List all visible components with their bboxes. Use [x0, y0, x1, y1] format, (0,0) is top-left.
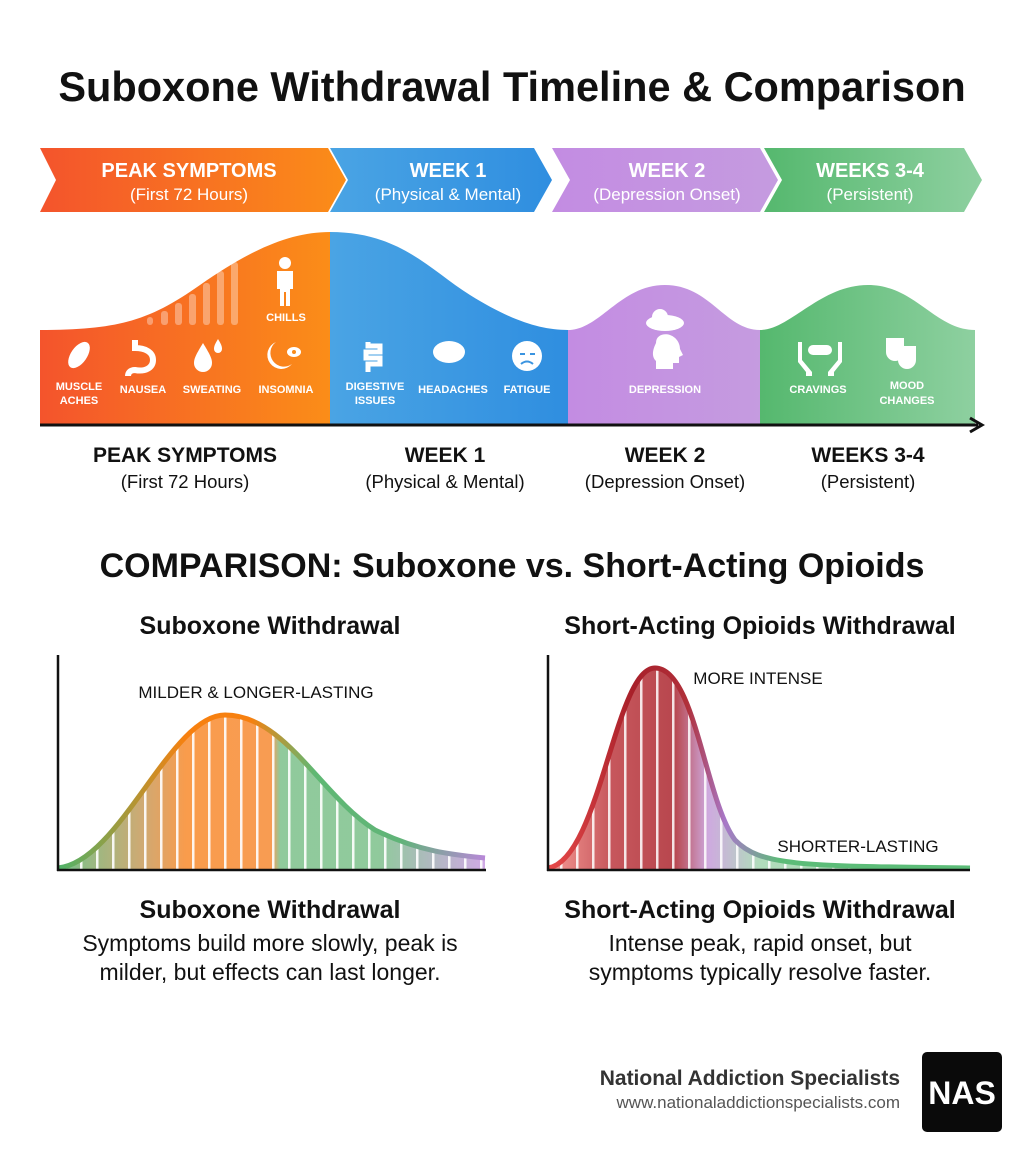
icon: depression: DEPRESSION — [629, 384, 701, 396]
phase labels: (Depression Onset) — [585, 471, 745, 492]
panel: suboxone: Symptoms build more slowly, peak is — [82, 930, 458, 956]
chevron: peak symptoms — [40, 148, 346, 212]
phase labels: (Persistent) — [821, 471, 915, 492]
icon: sweating: SWEATING — [183, 384, 241, 396]
chevron: weeks 3-4: WEEKS 3-4 — [816, 160, 925, 182]
icon: insomnia — [258, 342, 314, 396]
phase labels: (Physical & Mental) — [365, 471, 525, 492]
chart: short-acting curve — [547, 655, 970, 871]
footer brand: www.nationaladdictionspecialists.com — [616, 1093, 900, 1112]
panel: short-acting opioids: symptoms typically resolve faster. — [589, 959, 931, 985]
chart: short-acting curve: MORE INTENSE — [693, 669, 823, 688]
icon: headaches — [418, 341, 488, 396]
icon: mood changes — [879, 338, 935, 407]
phase labels: WEEKS 3-4 — [811, 444, 925, 467]
phase labels: WEEK 1 — [405, 444, 486, 467]
chevron: week 1 — [330, 148, 552, 212]
chevron: weeks 3-4 — [764, 148, 982, 212]
footer brand: National Addiction Specialists — [600, 1067, 900, 1090]
footer brand — [600, 1052, 1002, 1132]
icon: muscle aches — [56, 338, 102, 407]
chart: suboxone curve: MILDER & LONGER-LASTING — [138, 683, 374, 702]
phase banner — [40, 148, 982, 212]
chevron: peak symptoms: PEAK SYMPTOMS — [101, 160, 277, 182]
panel: short-acting opioids: Intense peak, rapid onset, but — [608, 930, 912, 956]
chevron: week 2: (Depression Onset) — [593, 185, 741, 204]
wave: week 1 — [330, 232, 568, 425]
chart: suboxone curve — [57, 655, 486, 871]
chevron: week 1: (Physical & Mental) — [375, 185, 521, 204]
wave: week 2 — [568, 285, 760, 425]
chevron: peak symptoms: (First 72 Hours) — [130, 185, 248, 204]
icon: nausea: NAUSEA — [120, 384, 166, 396]
icon: digestive: DIGESTIVE — [346, 381, 404, 393]
chevron: weeks 3-4: (Persistent) — [827, 185, 913, 204]
icon: digestive — [346, 342, 404, 407]
icon: mood changes: CHANGES — [879, 395, 935, 407]
panel: suboxone: Suboxone Withdrawal — [140, 896, 400, 924]
icon: cravings — [789, 342, 847, 396]
arrow: timeline axis — [40, 418, 982, 432]
wave: peak symptoms — [40, 232, 330, 425]
comparison heading: COMPARISON: Suboxone vs. Short-Acting Opioids — [100, 547, 924, 585]
panel: short-acting opioids: Short-Acting Opioids Withdrawal — [564, 612, 956, 640]
panel: suboxone: milder, but effects can last longer. — [100, 959, 440, 985]
timeline wave — [40, 232, 982, 432]
icon: cravings: CRAVINGS — [789, 384, 847, 396]
panel: suboxone — [57, 612, 486, 985]
phase labels — [93, 444, 925, 492]
phase labels: WEEK 2 — [625, 444, 705, 467]
icon: nausea — [120, 340, 166, 396]
chart: short-acting curve: SHORTER-LASTING — [777, 837, 939, 856]
phase labels: (First 72 Hours) — [121, 471, 249, 492]
icon: muscle aches: MUSCLE — [56, 381, 102, 393]
icon: sweating — [183, 339, 241, 396]
icon: intensity bars — [147, 262, 238, 325]
chevron: week 2 — [552, 148, 778, 212]
title: Suboxone Withdrawal Timeline & Comparison — [58, 63, 966, 110]
icon: digestive: ISSUES — [355, 395, 395, 407]
icon: fatigue — [504, 341, 550, 396]
icon: mood changes: MOOD — [890, 380, 924, 392]
icon: muscle aches: ACHES — [60, 395, 98, 407]
icon: chills — [266, 257, 306, 324]
chevron: week 1: WEEK 1 — [410, 160, 486, 182]
icon: insomnia: INSOMNIA — [258, 384, 314, 396]
logo: NAS — [922, 1052, 1002, 1132]
panel: suboxone: Suboxone Withdrawal — [140, 612, 400, 640]
icon: fatigue: FATIGUE — [504, 384, 550, 396]
icon: headaches: HEADACHES — [418, 384, 488, 396]
wave: weeks 3-4 — [760, 285, 975, 425]
panel: short-acting opioids: Short-Acting Opioids Withdrawal — [564, 896, 956, 924]
logo: NAS: NAS — [928, 1075, 996, 1111]
icon: chills: CHILLS — [266, 312, 306, 324]
chevron: week 2: WEEK 2 — [629, 160, 705, 182]
phase labels: PEAK SYMPTOMS — [93, 444, 277, 467]
icon: depression — [629, 309, 701, 396]
panel: short-acting opioids — [547, 612, 970, 985]
